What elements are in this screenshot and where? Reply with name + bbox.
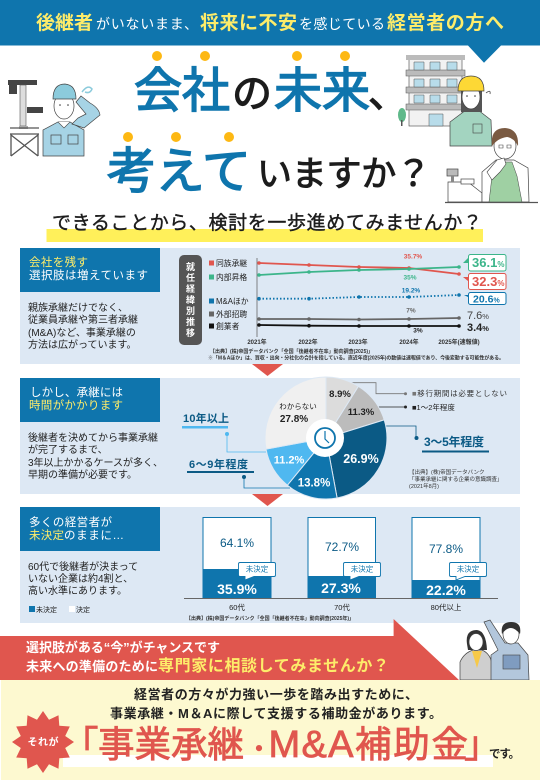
leader labels: 6〜9年程度 <box>189 457 248 471</box>
text: panel 1 body: 親族承継だけでなく、 <box>28 301 128 314</box>
leader labels <box>182 383 507 488</box>
pie chart: 26.9% <box>343 452 379 466</box>
title line 2 <box>107 132 431 199</box>
arrow: panel 2 to 3 <box>252 494 283 506</box>
text: panel 2 body <box>28 431 163 481</box>
label: vertical chart title: 任 <box>186 272 195 283</box>
value callouts: 36.1% <box>472 255 504 270</box>
pie chart: 13.8% <box>298 478 330 490</box>
text: panel 1 body: (M&A)など、事業承継の <box>28 326 136 339</box>
heading: panel 2: しかし、承継には <box>30 386 123 399</box>
title line 1: の <box>232 72 272 116</box>
text: subsidy intro <box>110 687 442 721</box>
line chart: M&Aほか <box>216 297 249 306</box>
text: panel 1 body <box>28 301 138 351</box>
heading: panel 3: 多くの経営者が <box>29 515 112 529</box>
title line 2: いますか？ <box>257 155 431 194</box>
bar chart: 未決定 <box>246 564 269 574</box>
bar chart: 22.2% <box>426 582 466 598</box>
bar chart: 35.9% <box>217 581 257 597</box>
header banner <box>0 0 540 63</box>
legend <box>29 605 90 614</box>
text: panel 3 body: いない企業は約4割と、 <box>28 572 133 585</box>
heading: panel 2 <box>20 378 160 422</box>
leader labels: ■1～2年程度 <box>412 402 455 412</box>
heading: panel 1: 選択肢は増えています <box>29 268 148 282</box>
text: subsidy intro: 経営者の方々が力強い一歩を踏み出すために、 <box>134 687 418 702</box>
source: panel 2: 「事業承継に関する企業の意識調査」 <box>409 475 503 483</box>
line chart: 35.7% <box>404 254 422 260</box>
panel 2: time required <box>20 378 520 494</box>
text: panel 2 body: 後継者を決めてから事業承継 <box>28 431 158 444</box>
text: panel 3 body <box>28 560 138 597</box>
pie chart: わからない <box>279 402 317 411</box>
bar chart: 64.1% <box>220 536 254 550</box>
label: vertical chart title <box>179 255 202 345</box>
line chart: 35% <box>403 274 417 282</box>
heading: panel 2: 時間がかかります <box>29 398 123 412</box>
text: panel 2 body: が完了するまで、 <box>28 443 108 456</box>
text: panel 2 body: 早期の準備が必要です。 <box>28 468 137 481</box>
source: panel 2: 【出典】(株)帝国データバンク <box>409 468 484 476</box>
label: vertical chart title: 移 <box>186 327 195 338</box>
subtitle with highlight <box>46 212 483 242</box>
subsidy name: M&A <box>268 724 354 766</box>
line chart: ※「M＆Aほか」は、買収・出向・分社化の合計を指している。直近年度(2025年)の数値は速報値であり、今後変動する可能性がある。 <box>208 354 504 362</box>
consultation arrow banner <box>0 619 459 680</box>
icon: worker and drill press <box>8 80 100 156</box>
text: subsidy intro: 事業承継・M＆Aに際して支援する補助金があります。 <box>110 706 442 721</box>
title line 2: 考えて <box>107 145 251 199</box>
icon: office building <box>398 55 465 126</box>
line chart: 2022年 <box>298 338 318 346</box>
panel 3: undecided successors <box>20 507 520 623</box>
source: panel 2 <box>409 468 503 490</box>
text: panel 3 body: 高い水準にあります。 <box>28 584 127 597</box>
consultation arrow banner: 未来への準備のために <box>26 659 158 674</box>
legend: 決定 <box>76 605 90 614</box>
header banner: を感じている <box>299 16 385 32</box>
subsidy panel: です。 <box>489 748 520 760</box>
line chart: 創業者 <box>216 321 240 331</box>
icon: shopkeeper at register <box>445 128 538 202</box>
label: vertical chart title: 就 <box>186 262 195 272</box>
line chart: 19.2% <box>402 288 420 294</box>
heading: panel 3 <box>20 507 160 551</box>
line chart: 内部昇格 <box>216 272 247 282</box>
line chart: 2025年(速報値) <box>438 338 480 346</box>
header banner: 後継者 <box>36 12 93 34</box>
consultation arrow banner: 選択肢がある“今”がチャンスです <box>26 640 220 655</box>
bar chart <box>184 518 498 612</box>
title line 1 <box>134 51 408 118</box>
line chart: 外部招聘 <box>216 309 247 319</box>
consultation arrow banner: 専門家に相談してみませんか？ <box>158 656 389 675</box>
leader labels: 3〜5年程度 <box>424 434 484 449</box>
value callouts: 7.6% <box>467 310 489 322</box>
header banner: 経営者の方へ <box>387 11 504 34</box>
bar chart: 80代以上 <box>431 602 462 612</box>
pie chart: 11.3% <box>348 407 375 418</box>
source: panel 2: (2021年8月) <box>409 482 439 490</box>
bar chart: 72.7% <box>325 540 359 554</box>
text: panel 3 body: 60代で後継者が決まって <box>28 560 138 573</box>
title line 1: 、 <box>368 72 408 116</box>
subsidy name: 」 <box>464 724 500 765</box>
bar chart: 70代 <box>334 602 350 612</box>
text: panel 1 body: 方法は広がっています。 <box>28 338 136 351</box>
bar chart: 未決定 <box>457 564 480 574</box>
pie chart: 8.9% <box>329 389 351 400</box>
heading: panel 1 <box>20 248 160 292</box>
subsidy name: ・ <box>247 736 271 763</box>
subsidy name: 事業承継 <box>98 724 244 765</box>
bar chart: 77.8% <box>429 542 463 556</box>
subsidy panel <box>1 680 540 780</box>
subsidy name <box>62 724 500 766</box>
pie chart: 27.8% <box>280 414 308 425</box>
value callouts: 20.6% <box>473 294 500 306</box>
label: vertical chart title: 緯 <box>186 294 195 305</box>
line chart: 【出典】(株)帝国データバンク「全国「後継者不在率」動向調査(2025)」 <box>210 348 373 355</box>
source: panel 3: 【出典】(株)帝国データバンク「全国「後継者不在率」動向調査(2025年)」 <box>186 615 354 622</box>
bar chart: 27.3% <box>321 580 361 596</box>
icon: two consultants <box>460 620 529 680</box>
subtitle with highlight: できることから、検討を一歩進めてみませんか？ <box>52 212 482 234</box>
pie chart <box>265 377 387 499</box>
line chart <box>208 254 506 362</box>
bar chart: 未決定 <box>351 564 374 574</box>
subsidy name: 「 <box>62 724 98 765</box>
heading: panel 1: 会社を残す <box>29 255 88 269</box>
label: vertical chart title: 経 <box>186 283 195 294</box>
heading: panel 3: のままに… <box>64 529 124 542</box>
leader labels: ■移行期間は必要としない <box>412 388 507 398</box>
value callouts: 3.4% <box>467 322 489 334</box>
text: panel 1 body: 従業員承継や第三者承継 <box>28 313 138 326</box>
arrow: panel 1 to 2 <box>252 364 283 376</box>
value callouts <box>463 254 506 334</box>
leader labels: 10年以上 <box>183 411 229 425</box>
label: vertical chart title: 推 <box>186 316 195 327</box>
line chart: 3% <box>413 328 423 334</box>
bar chart: 60代 <box>229 602 245 612</box>
icon: woman with helmet <box>450 76 492 146</box>
line chart: 2021年 <box>247 338 267 346</box>
panel 1: succession options <box>20 248 520 364</box>
title line 1: 未来 <box>274 65 370 118</box>
value callouts: 32.3% <box>472 274 504 289</box>
header banner: がいないまま、 <box>96 16 198 32</box>
badge: starburst: それが <box>28 736 58 748</box>
text: panel 2 body: 3年以上かかるケースが多く、 <box>28 456 163 469</box>
title line 1: 会社 <box>134 65 230 118</box>
subsidy name: 補助金 <box>355 724 468 765</box>
label: vertical chart title: 別 <box>186 305 195 316</box>
line chart: 2023年 <box>348 338 368 346</box>
heading: panel 3: 未決定 <box>29 529 64 542</box>
legend: 未決定 <box>36 605 57 614</box>
pie chart: 11.2% <box>274 454 305 466</box>
line chart: 7% <box>406 308 416 314</box>
header banner: 将来に不安 <box>200 12 297 34</box>
line chart: 2024年 <box>399 338 419 346</box>
callouts: undecided <box>238 562 486 580</box>
line chart: 同族承継 <box>216 258 247 268</box>
badge: starburst <box>12 711 74 773</box>
icon: clock <box>306 419 344 457</box>
